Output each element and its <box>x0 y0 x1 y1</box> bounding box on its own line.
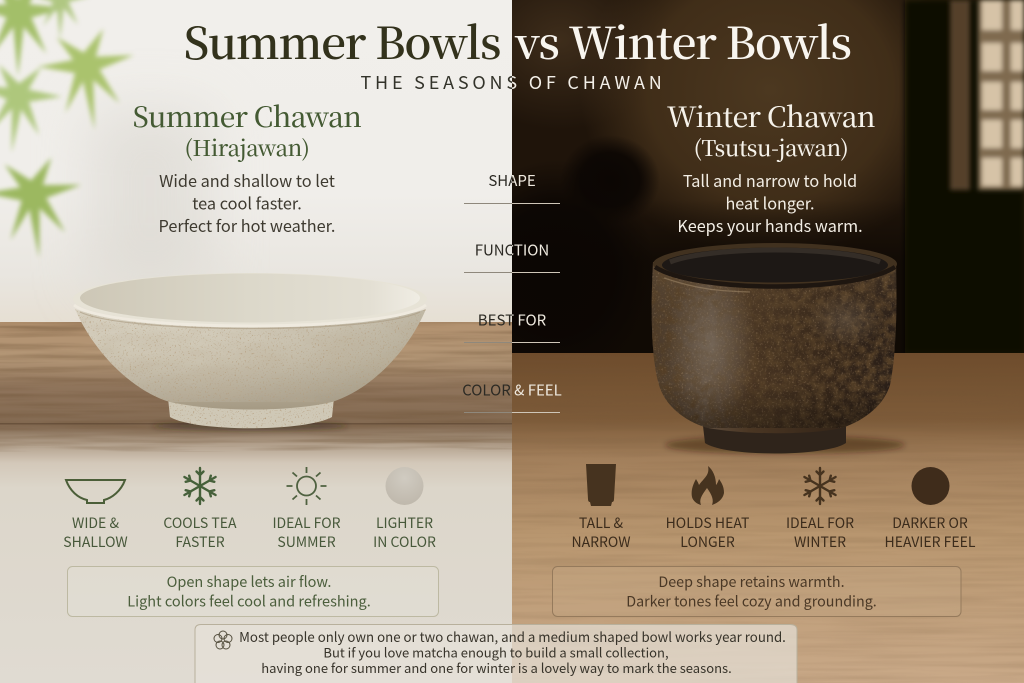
icon: light swatch <box>386 467 424 505</box>
labels: summer features: WIDE & <box>72 513 119 533</box>
text: summer description <box>159 168 335 237</box>
icon: dark swatch <box>912 467 950 505</box>
labels: summer features: IDEAL FOR <box>272 513 341 533</box>
labels: winter features: IDEAL FOR <box>786 513 854 533</box>
label: function <box>476 244 548 256</box>
label: color and feel <box>463 384 562 396</box>
icon: summer snowflake <box>183 468 217 504</box>
label: best for <box>479 314 546 326</box>
background: summer half <box>0 0 512 683</box>
labels: winter features <box>572 513 976 552</box>
callout: bottom note: Most people only own one or two chawan, and a medium shaped bowl works year round. <box>239 627 786 646</box>
text: summer description: Perfect for hot weather. <box>159 213 335 237</box>
label: shape: SHAPE <box>488 170 536 191</box>
shoji window <box>950 0 1024 190</box>
heading: winter chawan: Winter Chawan <box>667 96 875 136</box>
heading: summer chawan: (Hirajawan) <box>185 132 309 163</box>
callout: summer: Open shape lets air flow. <box>167 571 331 592</box>
title: Summer Bowls <box>184 8 500 72</box>
labels: summer features <box>63 513 436 552</box>
icon: winter snowflake <box>803 468 837 504</box>
label: color and feel: COLOR & FEEL <box>462 380 562 400</box>
callout: summer: Light colors feel cool and refreshing. <box>127 590 371 612</box>
callout: winter <box>552 566 961 616</box>
labels: winter features: HEAVIER FEEL <box>884 532 976 552</box>
subtitle: THE SEASONS OF CHAWAN <box>360 69 666 95</box>
text: summer description: tea cool faster. <box>192 190 302 214</box>
label: best for: BEST FOR <box>478 310 547 330</box>
labels: winter features: LONGER <box>680 532 735 552</box>
labels: winter features: HOLDS HEAT <box>666 513 749 533</box>
label: best for: BEST FOR <box>478 310 547 330</box>
callout: bottom note: But if you love matcha enough to build a small collection, <box>323 642 669 662</box>
labels: winter features: TALL & <box>579 513 624 533</box>
icon: wide shallow bowl <box>66 480 125 503</box>
labels: summer features: IN COLOR <box>373 532 436 552</box>
title <box>184 8 851 72</box>
label: shape <box>489 175 535 186</box>
title: vs Winter Bowls <box>514 8 851 72</box>
text: winter description: Keeps your hands warm. <box>677 213 863 237</box>
table shadows under bowls <box>152 421 905 454</box>
labels: winter features: NARROW <box>572 532 630 552</box>
heading: summer chawan <box>133 96 361 163</box>
icon: flower <box>214 631 232 649</box>
heading: summer chawan: Summer Chawan <box>133 96 361 136</box>
subtitle: THE SEASONS OF CHAWAN <box>360 69 666 95</box>
labels: summer features: LIGHTER <box>376 513 433 533</box>
callout: bottom note <box>195 624 797 683</box>
heading: winter chawan: (Tsutsu-jawan) <box>694 132 848 163</box>
summer bowl photo <box>70 273 430 435</box>
callout: bottom note: having one for summer and one for winter is a lovely way to mark the seasons. <box>261 658 732 677</box>
label: shape: SHAPE <box>488 170 536 191</box>
labels: winter features: DARKER OR <box>892 513 968 533</box>
winter bowl photo <box>648 243 900 454</box>
center comparison labels <box>462 170 562 400</box>
text: summer description: Wide and shallow to let <box>159 168 335 192</box>
labels: summer features: SUMMER <box>277 532 336 552</box>
label: function: FUNCTION <box>475 240 549 260</box>
icon: tall narrow cup <box>586 464 616 506</box>
callout: winter: Deep shape retains warmth. <box>658 571 845 592</box>
labels: summer features: COOLS TEA <box>163 513 237 533</box>
callout: winter: Darker tones feel cozy and grounding. <box>626 590 877 612</box>
text: winter description: Tall and narrow to hold <box>683 168 857 192</box>
icon: flame <box>692 466 724 505</box>
text: winter description <box>677 168 863 237</box>
background: winter half <box>512 0 1024 683</box>
subtitle <box>361 76 660 89</box>
labels: summer features: FASTER <box>175 532 225 552</box>
labels: winter features: WINTER <box>794 532 846 552</box>
icon: blurred maple leaves <box>0 0 143 263</box>
label: function: FUNCTION <box>475 240 549 260</box>
heading: winter chawan <box>667 96 875 163</box>
labels: summer features: SHALLOW <box>63 532 128 552</box>
text: winter description: heat longer. <box>725 190 815 214</box>
icon: sun <box>286 467 326 505</box>
label: color and feel: COLOR & FEEL <box>462 380 562 400</box>
callout: summer <box>68 566 438 616</box>
